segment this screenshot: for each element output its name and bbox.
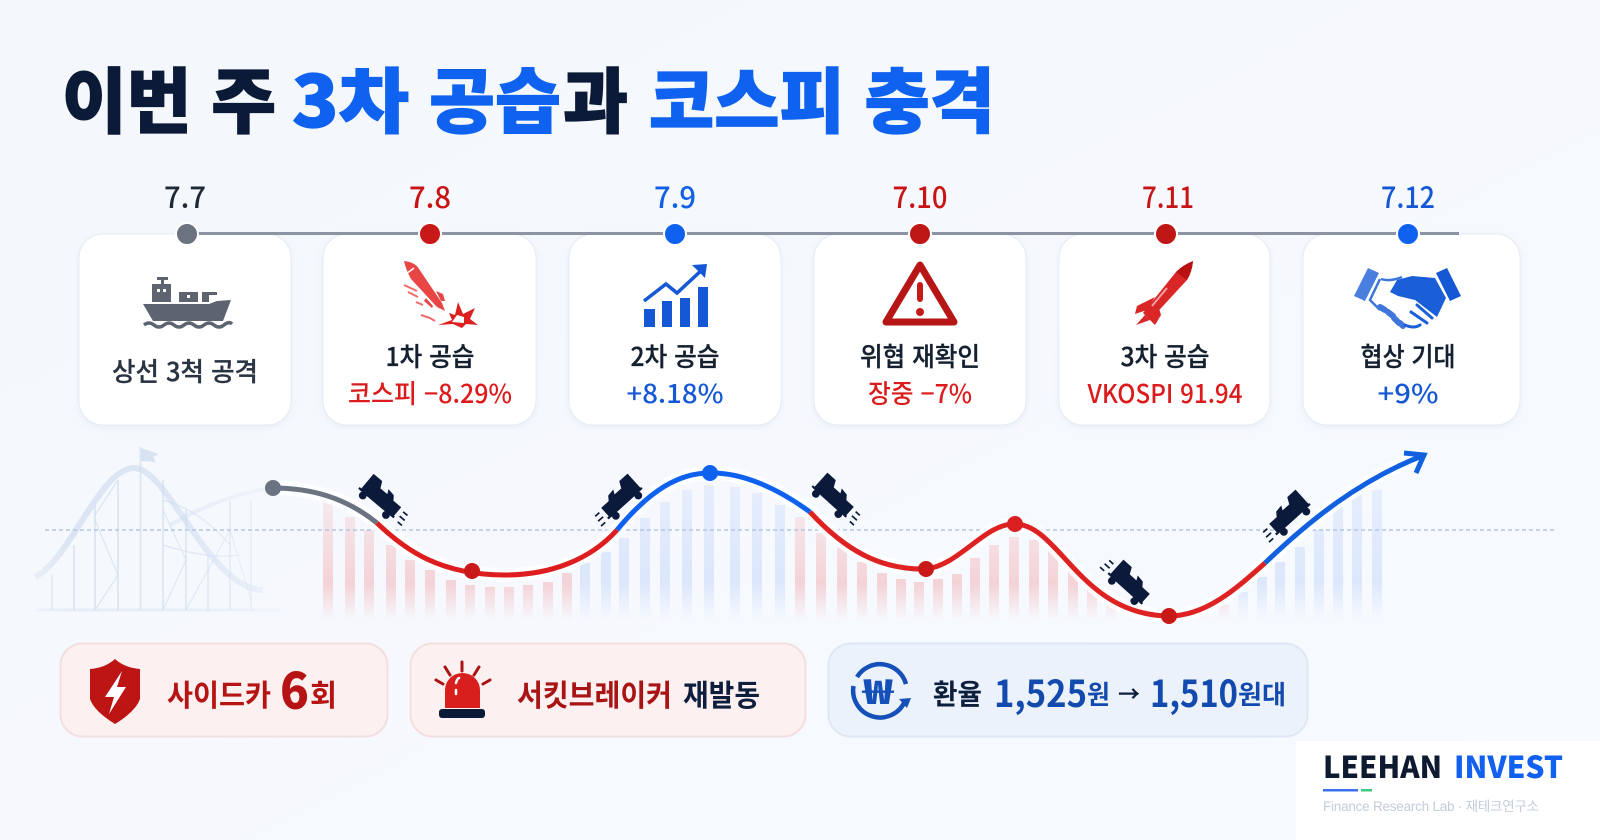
date 7.9: 7.9 (654, 175, 696, 217)
text: plus 8.18: +8.18% (626, 374, 724, 411)
panel: exchange rate (828, 644, 1308, 736)
panel: card 7.10 (814, 234, 1026, 425)
date 7.8: 7.8 (409, 175, 451, 217)
text: KOSPI minus: 코스피 −8.29% (348, 374, 512, 411)
date 7.7 (164, 175, 206, 245)
panel: circuit breaker (410, 644, 806, 736)
icon: lightning shield (90, 659, 140, 724)
panel: card 7.9 (569, 234, 781, 425)
title: 이번 주 (62, 46, 276, 148)
icon: won exchange (853, 664, 911, 718)
reference dashed line (45, 529, 1556, 531)
icon: siren (436, 662, 490, 718)
title: 3차 (292, 46, 409, 148)
curve: blue rise (617, 473, 810, 530)
text: intraday minus: 장중 −7% (868, 374, 972, 411)
text: third strike: 3차 공습 (1120, 337, 1210, 374)
date 7.11 (1142, 175, 1194, 245)
icon: rising bars (644, 264, 708, 327)
red bars: second drop (795, 517, 1229, 622)
curve: red drop (377, 523, 617, 575)
text: exchange rate values: 원 (1087, 675, 1110, 712)
title (62, 46, 995, 148)
text: sidecar 6 times: 6 (280, 652, 309, 724)
icon: cart 3 (807, 471, 868, 530)
title: 공습 (429, 46, 561, 148)
text: sidecar 6 times: 사이드카 (167, 671, 271, 715)
red bars: first drop (323, 500, 572, 622)
text: exchange rate values (994, 664, 1286, 718)
title: 과 (563, 46, 628, 148)
date 7.8 (409, 175, 451, 245)
text: exchange rate values: 원대 (1238, 675, 1286, 712)
arrow: blue recovery (1265, 453, 1424, 563)
text: threat reconfirm: 위협 재확인 (860, 337, 980, 374)
icon: cart 4 (1096, 551, 1156, 609)
blue bars: rebound (580, 485, 785, 622)
text: exchange rate values: 1,510 (1150, 664, 1238, 718)
panel: card 7.12 (1303, 234, 1520, 425)
background roller coaster (35, 447, 280, 610)
chart: rollercoaster market curve (35, 447, 1556, 624)
curve: red second drop (810, 512, 1265, 616)
icon: cart 2 (587, 473, 647, 531)
icon: cargo ship (143, 277, 232, 327)
date 7.12 (1381, 175, 1435, 245)
text: first strike: 1차 공습 (386, 337, 474, 374)
logo: Leehan Invest: LEEHAN (1323, 743, 1442, 787)
date 7.9 (654, 175, 696, 245)
icon: won exchange: ₩ (862, 665, 895, 714)
date 7.12: 7.12 (1381, 175, 1435, 217)
text: negotiation hopes: 협상 기대 (1360, 337, 1456, 374)
timeline (164, 175, 1459, 245)
panel: card 7.7 (79, 234, 291, 425)
text: circuit breaker: 서킷브레이커 (517, 671, 672, 715)
logo: Leehan Invest: Finance Research Lab · 재테크연구소 (1323, 795, 1539, 815)
text: VKOSPI: VKOSPI 91.94 (1087, 374, 1243, 411)
date 7.10 (892, 175, 948, 245)
date 7.11: 7.11 (1142, 175, 1194, 217)
curve: gray start (273, 488, 377, 523)
text: exchange rate values: 1,525 (994, 664, 1087, 718)
panel: card 7.11 (1059, 234, 1270, 425)
text: second strike: 2차 공습 (630, 337, 720, 374)
text: sidecar 6 times (167, 652, 337, 724)
curve points (265, 465, 1177, 624)
date 7.10: 7.10 (892, 175, 948, 217)
panel: card 7.8 (323, 234, 536, 425)
logo: Leehan Invest: INVEST (1454, 743, 1563, 787)
text: exchange rate label: 환율 (933, 673, 982, 713)
icon: falling missile with explosion (404, 261, 478, 328)
white halo under curve (273, 456, 1420, 616)
icon: cart 1 (354, 472, 416, 530)
text: plus 9: +9% (1378, 374, 1438, 411)
text: reactivated: 재발동 (683, 671, 760, 715)
panel: sidecar (60, 644, 388, 736)
text: sidecar 6 times: 회 (310, 671, 337, 715)
text: exchange rate values: → (1118, 677, 1140, 709)
icon: handshake (1354, 268, 1461, 327)
text: ship attack: 상선 3척 공격 (112, 352, 258, 389)
title: 코스피 충격 (649, 46, 995, 148)
blue bars: recovery (1238, 485, 1382, 622)
icon: rising missile (1135, 261, 1193, 325)
icon: cart 5 (1255, 489, 1315, 547)
logo: Leehan Invest (1296, 741, 1600, 840)
icon: warning triangle (886, 265, 954, 322)
date 7.7: 7.7 (164, 175, 206, 217)
